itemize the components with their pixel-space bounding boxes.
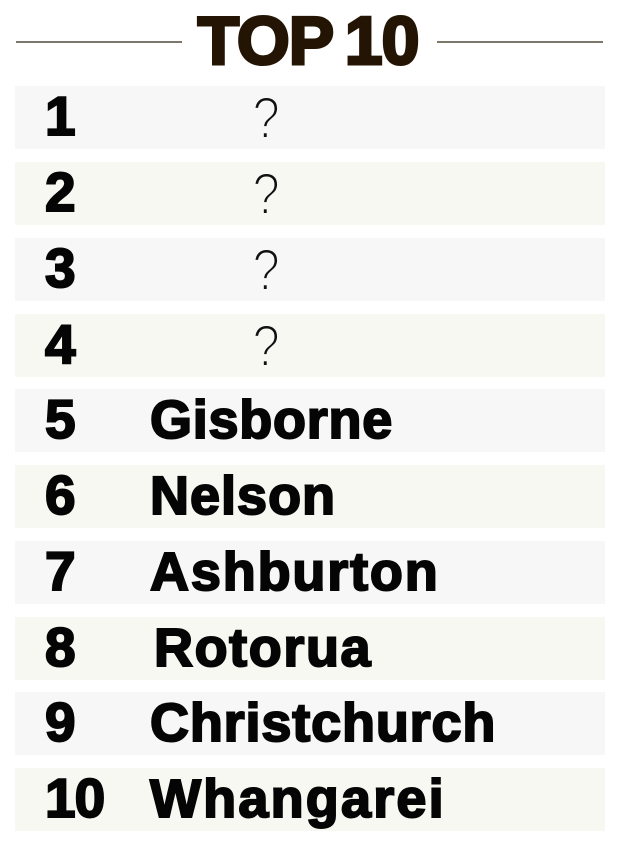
row 3: ?: [252, 238, 280, 303]
row 1: ?: [252, 86, 280, 151]
row 7: 7: [45, 540, 75, 602]
row 2: 2: [45, 161, 75, 223]
row 2: ?: [252, 162, 280, 227]
row 8: Rotorua: [154, 618, 372, 678]
row 5: [15, 389, 605, 452]
row 3: 3: [45, 237, 75, 299]
row 5: Gisborne: [150, 390, 393, 450]
row 10: [15, 768, 605, 831]
row 3: [15, 238, 605, 301]
row 8: [15, 617, 605, 680]
row 9: [15, 692, 605, 755]
row 4: 4: [45, 313, 75, 375]
title: TOP 10: [198, 3, 418, 79]
row 2: [15, 162, 605, 225]
row 4: ?: [252, 314, 280, 379]
row 10: Whangarei: [150, 769, 446, 829]
row 9: 9: [45, 691, 75, 753]
row 1: 1: [45, 85, 75, 147]
row 6: Nelson: [150, 466, 336, 526]
row 6: 6: [45, 464, 75, 526]
row 1: [15, 86, 605, 149]
row 9: Christchurch: [150, 693, 496, 753]
row 10: 10: [45, 767, 104, 829]
row 8: 8: [45, 616, 75, 678]
row 6: [15, 465, 605, 528]
row 5: 5: [45, 388, 75, 450]
row 7: Ashburton: [150, 542, 440, 602]
row 7: [15, 541, 605, 604]
row 4: [15, 314, 605, 377]
